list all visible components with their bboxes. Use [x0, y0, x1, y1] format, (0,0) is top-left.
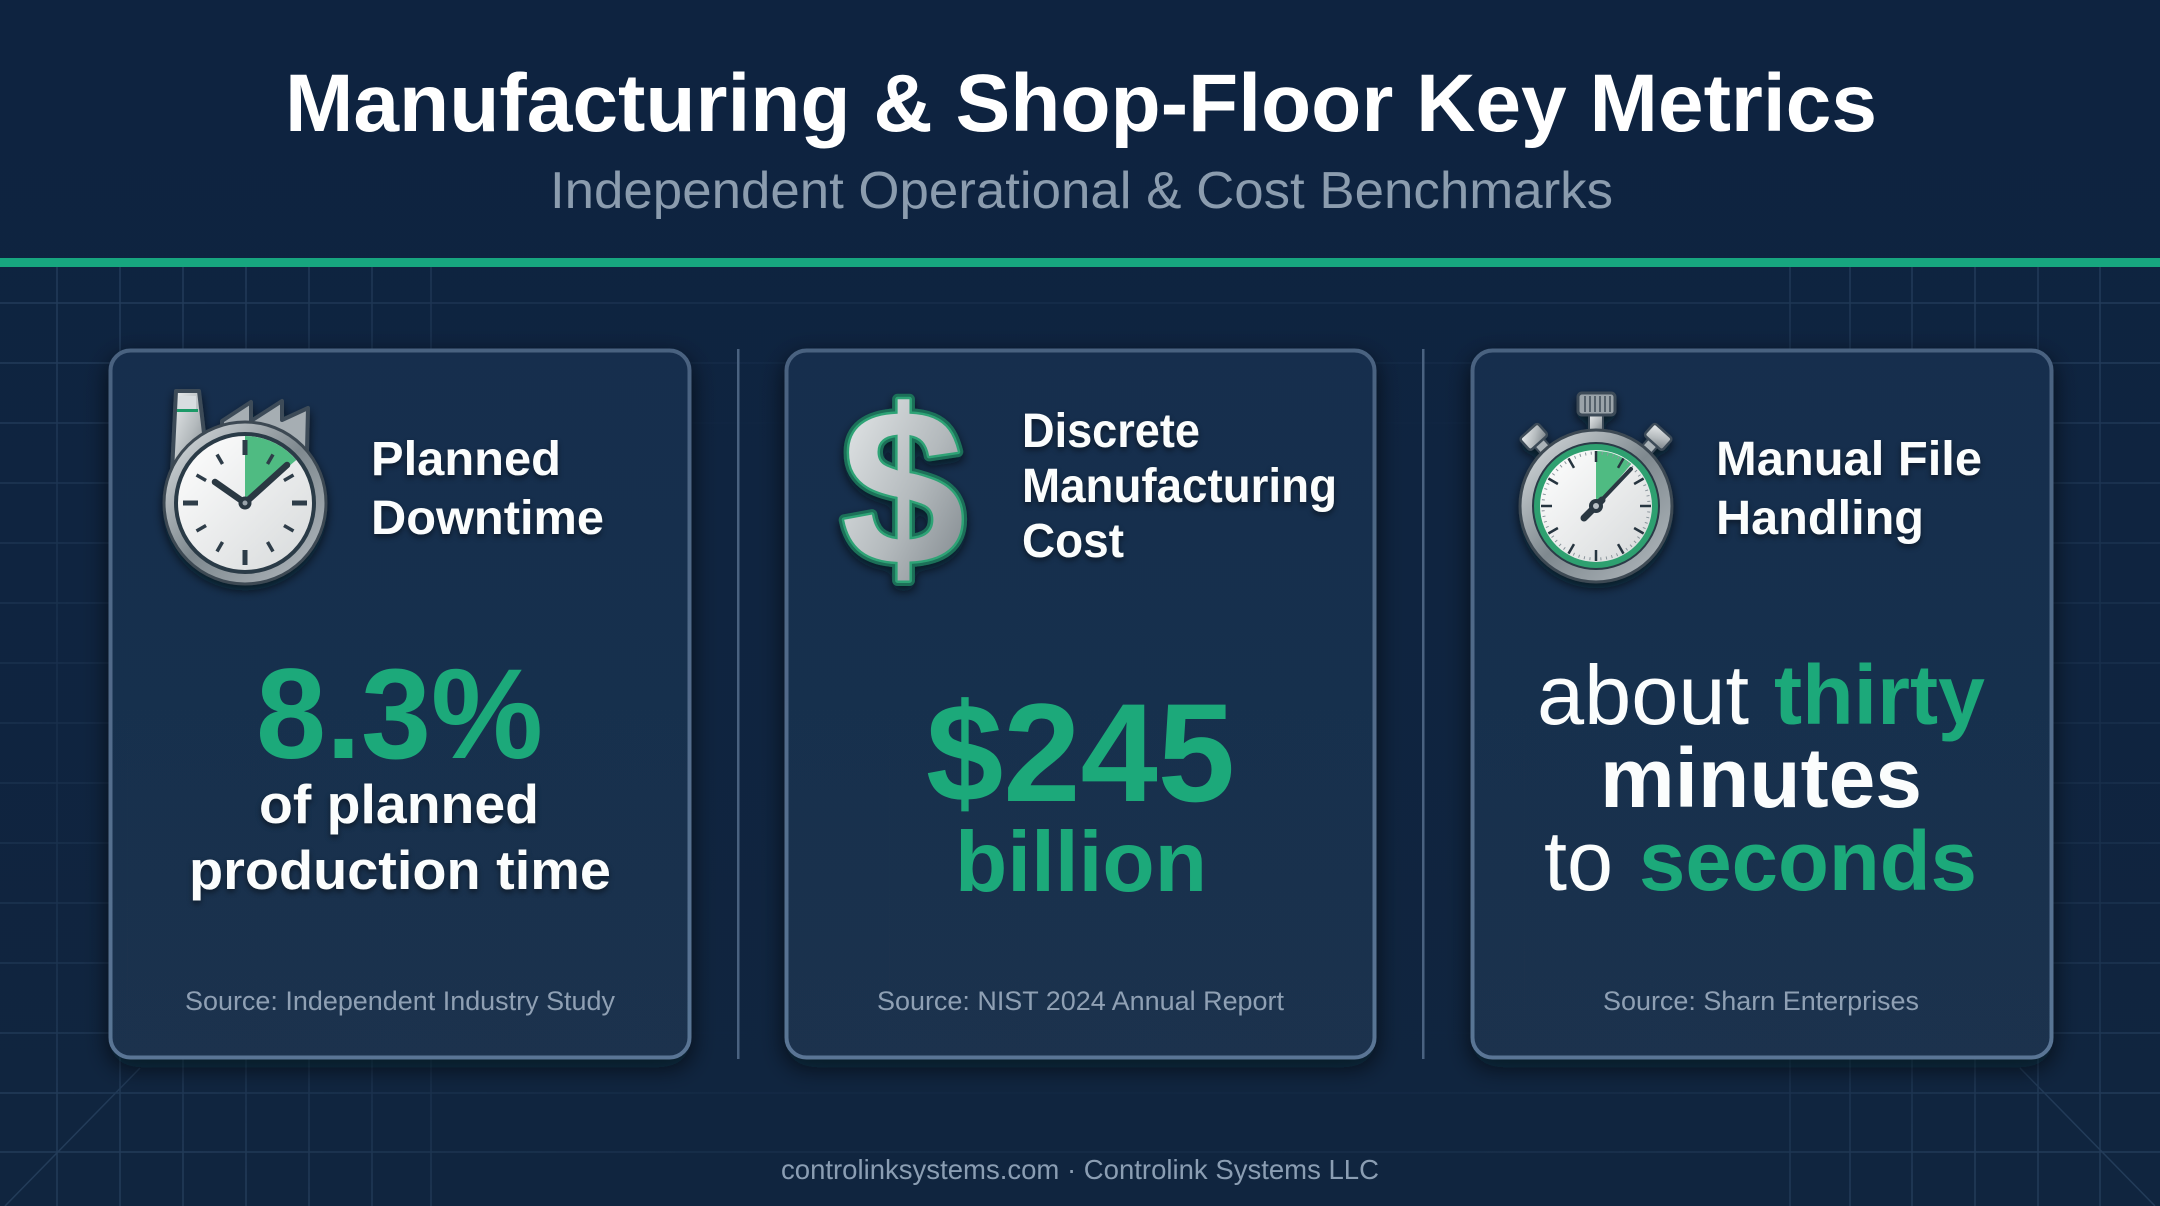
metric line: to seconds: to — [1544, 814, 1613, 908]
metric line: about thirty: thirty — [1774, 648, 1985, 742]
icon: dollar sign: $ — [841, 364, 965, 612]
heading: Downtime — [371, 492, 604, 545]
metric description — [189, 773, 611, 901]
divider left — [737, 349, 740, 1059]
source: Source: NIST 2024 Annual Report — [877, 986, 1284, 1016]
metric line: about thirty: about — [1537, 648, 1749, 742]
metric line: about thirty — [1537, 648, 1985, 742]
title: Manufacturing & Shop-Floor Key Metrics — [285, 58, 1877, 149]
source: Source: Independent Industry Study — [185, 986, 615, 1016]
heading: Handling — [1716, 492, 1924, 545]
heading: Manual File — [1716, 433, 1982, 486]
panel: planned downtime — [110, 350, 690, 1058]
card background — [1472, 350, 2052, 1058]
accent rule — [0, 258, 2160, 267]
metric line: to seconds: seconds — [1639, 814, 1977, 908]
icon: factory clock — [164, 391, 326, 584]
heading: Planned — [371, 433, 561, 486]
heading — [371, 433, 604, 545]
heading — [1716, 433, 1982, 545]
metric value: $245 — [926, 674, 1235, 831]
background grid — [0, 266, 2160, 1206]
heading — [1022, 405, 1337, 568]
subtitle: Independent Operational & Cost Benchmarks — [550, 162, 1613, 220]
panel: discrete manufacturing cost — [786, 350, 1374, 1058]
metric unit: billion — [955, 815, 1207, 910]
icon: dollar sign: $ — [841, 364, 965, 612]
metric value: 8.3% — [256, 643, 543, 786]
card background — [110, 350, 690, 1058]
heading: Cost — [1022, 515, 1124, 568]
metric description: of planned — [259, 773, 539, 835]
metric description: production time — [189, 839, 611, 901]
heading: Manufacturing — [1022, 460, 1337, 513]
source: Source: Sharn Enterprises — [1603, 986, 1919, 1016]
footer: controlinksystems.com · Controlink Systems LLC — [781, 1154, 1379, 1185]
panel: manual file handling — [1472, 350, 2052, 1058]
heading: Discrete — [1022, 405, 1200, 458]
divider right — [1422, 349, 1424, 1059]
metric line: minutes: minutes — [1600, 731, 1922, 825]
icon: stopwatch — [1520, 393, 1672, 582]
card background — [786, 350, 1374, 1058]
